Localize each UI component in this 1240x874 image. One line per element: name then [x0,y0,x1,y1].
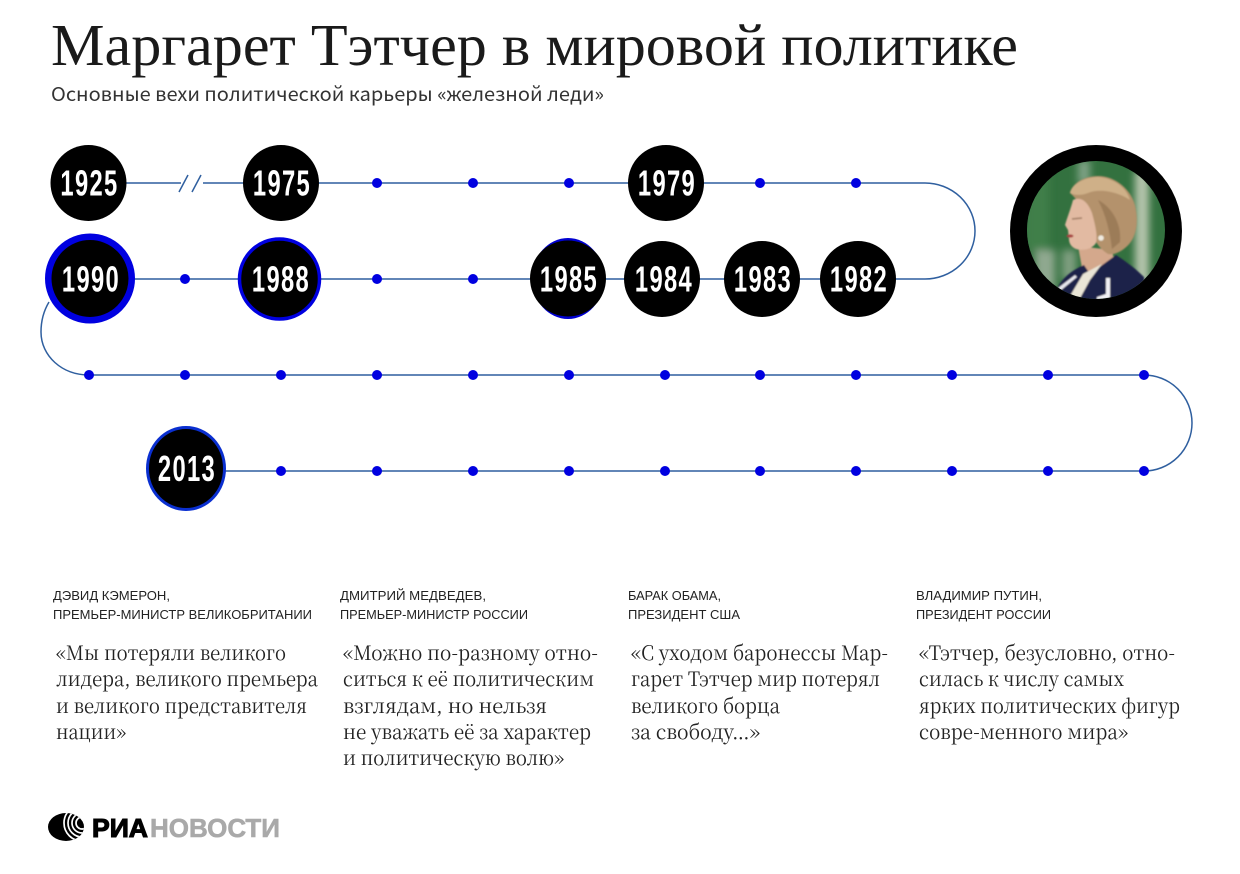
year 1984: 1984 [635,260,693,300]
quote: Cameron: ДЭВИД КЭМЕРОН, [53,588,170,603]
quote: Putin: совре-менного мира» [919,716,1128,745]
subtitle: Основные вехи политической карьеры «железной леди» [51,80,604,107]
portrait [1010,145,1182,317]
year 1983: 1983 [734,260,792,300]
year 1979: 1979 [638,164,696,204]
quote: Medvedev: ПРЕМЬЕР-МИНИСТР РОССИИ [340,607,528,622]
quote: Obama: «С уходом баронессы Мар- [631,637,888,666]
jacket [1056,255,1146,302]
year 2013 [148,428,224,510]
year 1979 [628,145,704,221]
quote: Medvedev: ситься к её политическим [343,663,594,692]
timeline path [41,175,1192,471]
quote: Putin: ПРЕЗИДЕНТ РОССИИ [916,607,1051,622]
year 2013: 2013 [158,449,216,489]
logo: RIA Novosti [48,813,278,841]
year 1982: 1982 [830,260,888,300]
icon: globe [48,813,84,841]
logo: RIA Novosti: НОВОСТИ [150,813,280,843]
quote: Obama: БАРАК ОБАМА, [628,588,721,603]
quote: Medvedev: «Можно по-разному отно- [343,637,598,666]
year 1983 [724,241,800,317]
quote: Obama [628,588,888,745]
timeline [41,145,1192,510]
year 1988 [240,239,320,319]
quote: Obama: великого борца [631,690,780,719]
quote: Medvedev: и политическую волю» [343,742,564,771]
quote: Cameron: «Мы потеряли великого [56,637,286,666]
quote: Putin: ярких политических фигур [919,690,1180,719]
quote: Obama: ПРЕЗИДЕНТ США [628,607,740,622]
quote: Medvedev [340,588,598,771]
quote: Obama: за свободу…» [631,716,760,745]
quote: Cameron: лидера, великого премьера [56,663,318,692]
quote: Putin: силась к числу самых [919,663,1125,692]
year 1982 [820,241,896,317]
year 1985 [530,238,606,319]
face [1065,199,1097,250]
year 1925: 1925 [60,164,119,204]
quote: Putin: «Тэтчер, безусловно, отно- [919,637,1175,666]
year 1990 [48,237,132,320]
quote: Putin [916,588,1180,745]
quote: Putin: ВЛАДИМИР ПУТИН, [916,588,1042,603]
quote: Obama: гарет Тэтчер мир потерял [631,663,880,692]
quote: Cameron [53,588,318,745]
title: Маргарет Тэтчер в мировой политике [51,12,1018,78]
quote: Medvedev: не уважать её за характер [343,716,591,745]
hair [1070,176,1137,254]
quote: Medvedev: взглядам, но нельзя [343,690,547,719]
year 1975: 1975 [253,164,311,204]
year 1975 [243,145,319,221]
logo: RIA Novosti: РИА [92,813,148,843]
year 1984 [624,241,700,317]
quote: Cameron: и великого представителя [56,690,307,719]
quote: Cameron: ПРЕМЬЕР-МИНИСТР ВЕЛИКОБРИТАНИИ [53,607,312,622]
blouse [1070,264,1102,302]
quote: Medvedev: ДМИТРИЙ МЕДВЕДЕВ, [340,588,486,603]
year 1985: 1985 [540,260,598,300]
neck [1078,246,1115,272]
year 1990: 1990 [62,260,120,300]
year 1925 [50,145,126,221]
timeline dots [84,178,1149,476]
quote: Cameron: нации» [56,716,126,745]
year 1988: 1988 [252,260,310,300]
